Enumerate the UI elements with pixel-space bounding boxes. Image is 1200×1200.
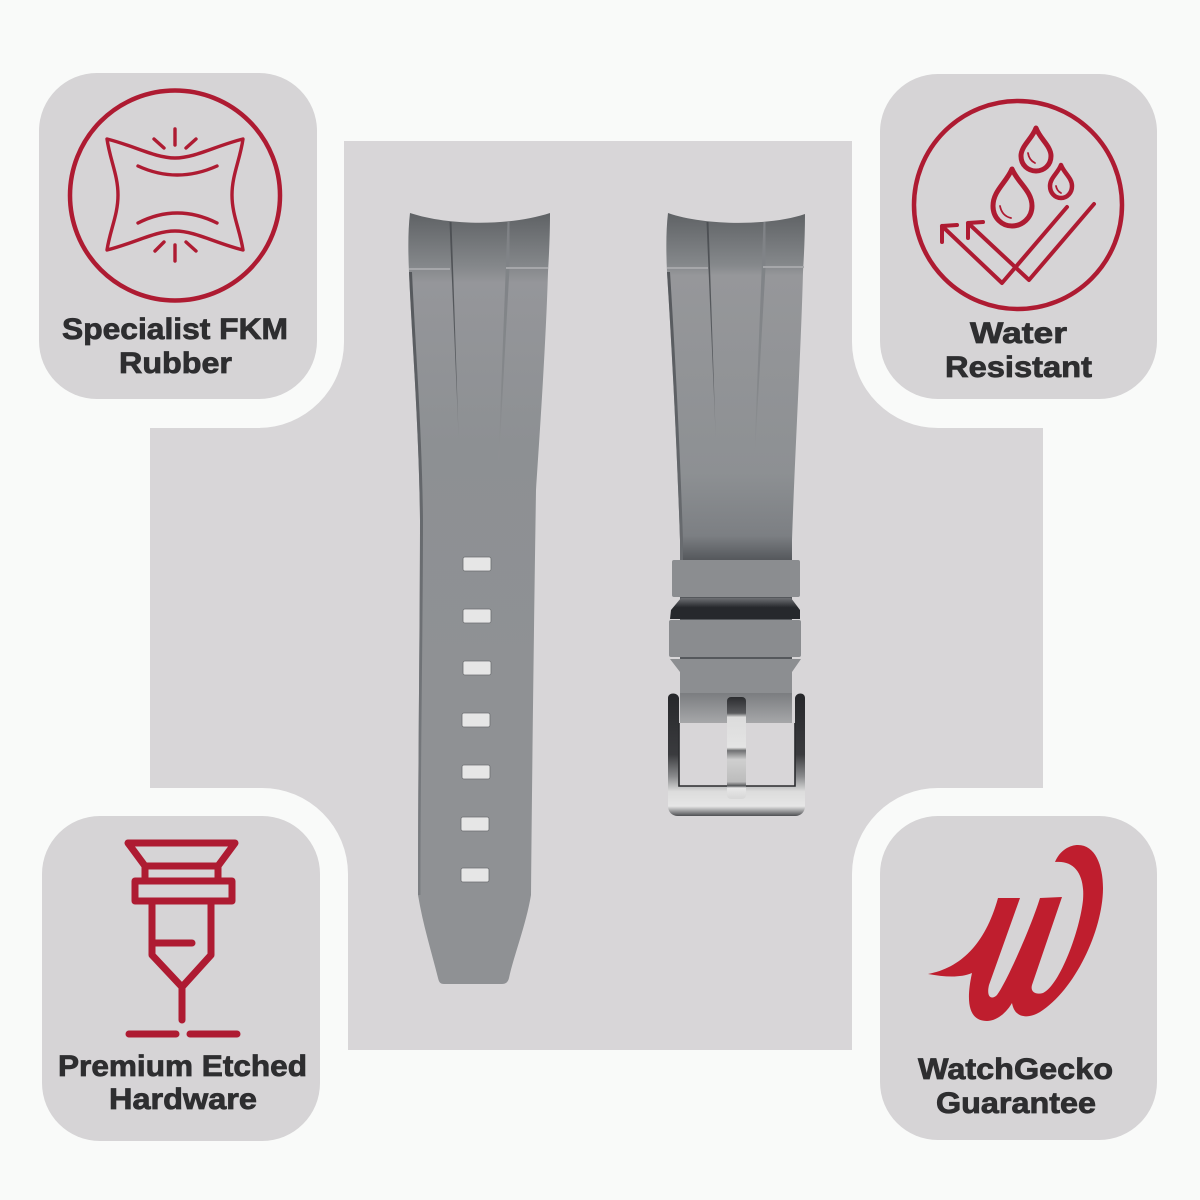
label: Water (970, 317, 1067, 350)
label: Specialist FKM (62, 313, 288, 346)
label line two: Hardware (109, 1083, 257, 1116)
keeper one (672, 560, 800, 597)
card: Specialist FKM Rubber (39, 73, 317, 399)
lower strap tab (670, 659, 801, 693)
buckle prong (727, 697, 746, 799)
dark gap between keepers (670, 598, 800, 619)
background panel: cross-shaped grey backdrop (150, 141, 1043, 1050)
label: WatchGecko (918, 1053, 1113, 1086)
buckle inner edge (679, 723, 795, 786)
buckle frame (668, 694, 805, 816)
strap seam highlights (667, 267, 804, 268)
strap edge shading (667, 272, 683, 560)
label line two: Resistant (945, 351, 1092, 384)
label: Premium Etched (58, 1050, 307, 1083)
label line two: Guarantee (936, 1087, 1096, 1120)
strap grooves (706, 222, 766, 452)
card: Water Resistant (880, 74, 1157, 399)
strap seam highlights (409, 268, 548, 269)
icon: laser etching nozzle (128, 843, 237, 1034)
keeper two (669, 620, 801, 657)
card: Premium Etched Hardware (42, 816, 320, 1141)
strap grooves (450, 222, 510, 460)
strap edge shading (409, 272, 423, 895)
icon: flexible rubber pillow in circle (70, 90, 280, 300)
strap holes (461, 557, 491, 882)
card: WatchGecko Guarantee (880, 816, 1157, 1140)
watch strap: buckle piece (666, 213, 805, 816)
watch strap: long piece (408, 213, 550, 984)
label line two: Rubber (119, 347, 232, 380)
icon: water drops and arrows in circle (914, 101, 1122, 309)
icon: WatchGecko W logo (928, 845, 1103, 1021)
